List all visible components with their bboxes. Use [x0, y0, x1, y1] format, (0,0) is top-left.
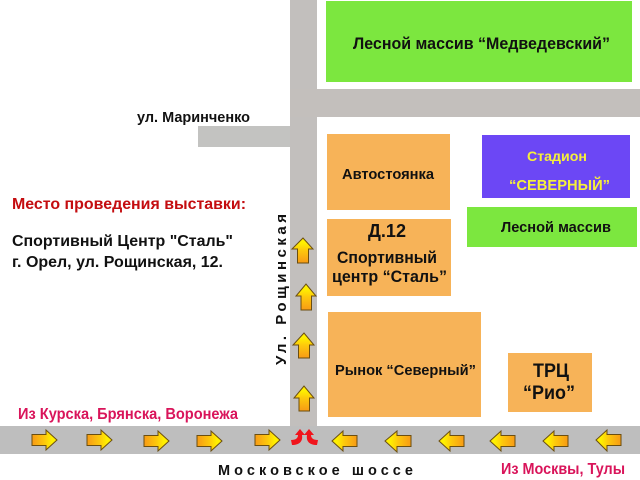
panel: stadium Severny: “СЕВЕРНЫЙ” [509, 176, 610, 194]
text block: venue address: Спортивный Центр "Сталь" [12, 233, 233, 250]
panel: forest [467, 207, 637, 247]
arrows: westbound on highway [332, 430, 621, 452]
panel: sports centre Stal: Д.12 [368, 220, 406, 241]
panel: forest Medvedevsky [326, 1, 632, 82]
label: from Moscow, Tula: Из Москвы, Тулы [501, 461, 625, 478]
arrows: eastbound on highway [32, 430, 280, 451]
panel: sports centre Stal: Спортивный [337, 249, 437, 267]
arrows: northbound on Roshchinskaya [292, 238, 316, 411]
label: Marinchenko street: ул. Маринченко [137, 109, 250, 126]
text block: venue address [12, 233, 233, 271]
label: Roshchinskaya street: Ул. Рощинская [273, 214, 290, 365]
road: Marinchenko street [198, 126, 290, 147]
panel: parking [327, 134, 450, 210]
text block: venue address: г. Орел, ул. Рощинская, 12. [12, 254, 223, 271]
panel: mall Rio: “Рио” [523, 383, 575, 404]
panel: market Severny [328, 312, 481, 417]
panel: forest: Лесной массив [501, 220, 611, 236]
panel: sports centre Stal: центр “Сталь” [332, 268, 447, 286]
heading: venue: Место проведения выставки: [12, 196, 246, 213]
panel: sports centre Stal [327, 219, 451, 296]
panel: forest Medvedevsky: Лесной массив “Медведевский” [353, 35, 610, 53]
panel: mall Rio [508, 353, 592, 412]
icon: red turn arrows at junction [291, 429, 318, 445]
label: Moskovskoe highway: Московское шоссе [218, 463, 413, 479]
panel: parking: Автостоянка [342, 167, 435, 183]
panel: mall Rio: ТРЦ [533, 361, 569, 382]
panel: stadium Severny: Стадион [527, 148, 587, 164]
panel: market Severny: Рынок “Северный” [335, 363, 476, 379]
road: upper horizontal street [290, 89, 640, 117]
road: vertical Roshchinskaya street [290, 0, 317, 427]
road: Moskovskoe highway [0, 426, 640, 454]
label: from Kursk, Bryansk, Voronezh: Из Курска, Брянска, Воронежа [18, 406, 238, 423]
panel: stadium Severny [482, 135, 630, 198]
